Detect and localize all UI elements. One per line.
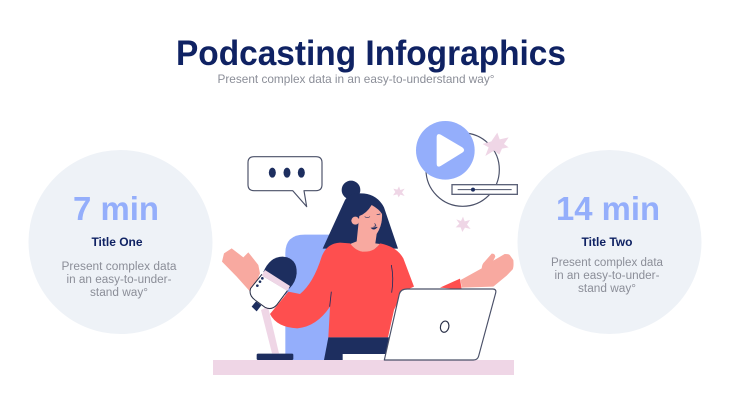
desk [213, 360, 514, 375]
stat: 14 min: 14 min [556, 190, 660, 227]
face details [365, 214, 380, 229]
text block: left description: stand way° [90, 287, 148, 299]
sweater [270, 243, 414, 337]
stat: 7 min: 7 min [73, 190, 159, 227]
panel: right stat circle [518, 150, 702, 334]
heading: title one: Title One [91, 235, 143, 249]
left hand and arm [222, 248, 260, 293]
text block: right description: Present complex data [551, 257, 664, 269]
decorative stars [393, 133, 509, 232]
laptop [343, 289, 496, 360]
text block: left description: Present complex data [62, 261, 177, 273]
title: Podcasting Infographics [176, 34, 566, 73]
microphone [250, 257, 297, 311]
panel: left stat circle [28, 150, 212, 334]
subtitle: Present complex data in an easy-to-understand way° [218, 72, 495, 86]
illustration: podcaster at desk [213, 121, 517, 375]
text block: left description: in an easy-to-under- [66, 274, 172, 286]
hair [323, 181, 398, 249]
icon: media player [416, 121, 517, 206]
text block: right description [551, 257, 664, 295]
icon: speech bubble [248, 157, 322, 207]
heading: title two: Title Two [582, 235, 632, 249]
face and neck [350, 205, 382, 252]
mic stand [257, 307, 293, 360]
chair [285, 235, 330, 360]
text block: right description: stand way° [578, 283, 636, 295]
sweater fold lines [330, 265, 393, 307]
text block: right description: in an easy-to-under- [554, 270, 660, 282]
text block: left description [62, 261, 177, 299]
right arm and hand [440, 254, 514, 289]
trousers [324, 337, 389, 360]
